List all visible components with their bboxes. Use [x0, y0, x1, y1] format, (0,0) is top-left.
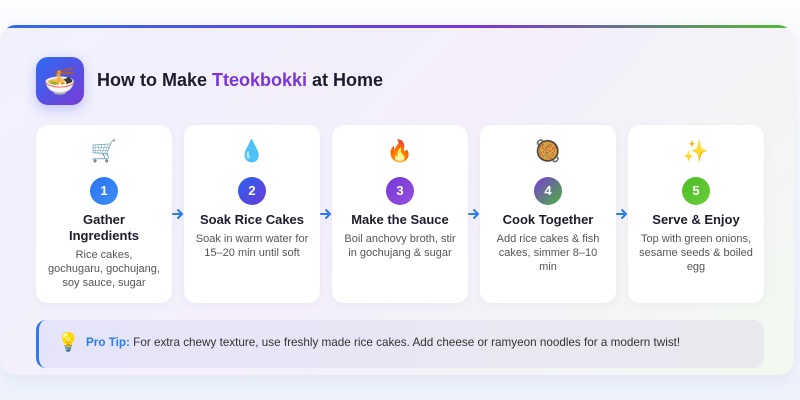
tip text: Pro Tip: For extra chewy texture, use freshly made rice cakes. Add cheese or ramyeon noodles for a modern twist! — [86, 336, 680, 349]
card 3 — [332, 125, 468, 303]
step 3 text: Boil anchovy broth, stir in gochujang & sugar — [344, 233, 456, 259]
step 5 text: Serve & Enjoy — [652, 212, 740, 227]
step number 1 — [90, 177, 118, 205]
step 3 text — [344, 212, 456, 259]
step number 2 — [238, 177, 266, 205]
step number 3 — [386, 177, 414, 205]
step number 3: 3 — [396, 183, 404, 198]
card 1 — [36, 125, 172, 303]
step 3 text: Make the Sauce — [351, 212, 449, 227]
arrow 1 — [172, 209, 183, 219]
step 4 text: Add rice cakes & fish cakes, simmer 8–10 min — [497, 233, 599, 273]
step 5 text: Top with green onions, sesame seeds & boiled egg — [639, 233, 753, 273]
icon: fire: 🔥 — [387, 140, 413, 163]
step 5 text — [639, 212, 753, 273]
step number 4 — [534, 177, 562, 205]
step 1 text: Gather Ingredients — [69, 212, 139, 243]
card 2 — [184, 125, 320, 303]
card 4 — [480, 125, 616, 303]
card 5 — [628, 125, 764, 303]
step number 5 — [682, 177, 710, 205]
pro tip callout — [36, 320, 764, 368]
step number 5: 5 — [692, 183, 700, 198]
step 1 text — [48, 212, 160, 289]
icon: water drop: 💧 — [239, 140, 265, 163]
icon: noodle bowl: 🍜 — [44, 66, 76, 96]
step 2 text: Soak Rice Cakes — [200, 212, 304, 227]
step 2 text: Soak in warm water for 15–20 min until soft — [196, 233, 308, 259]
step 1 text: soy sauce, sugar — [62, 277, 146, 289]
arrow 4 — [616, 209, 627, 219]
icon: noodle bowl — [36, 57, 84, 105]
step 2 text — [196, 212, 308, 259]
step 4 text — [496, 212, 599, 273]
step 4 text: Cook Together — [503, 212, 593, 227]
arrow 3 — [468, 209, 479, 219]
step number 4: 4 — [544, 183, 552, 198]
icon: sparkles: ✨ — [683, 140, 709, 163]
title: How to Make Tteokbokki at Home — [97, 70, 383, 90]
icon: cart: 🛒 — [91, 140, 117, 163]
arrow 2 — [320, 209, 331, 219]
icon: pan: 🥘 — [535, 140, 561, 163]
step 1 text: gochugaru, gochujang, — [48, 263, 160, 275]
icon: bulb: 💡 — [57, 332, 79, 352]
step 1 text: Rice cakes, — [76, 249, 132, 261]
step number 2: 2 — [248, 183, 256, 198]
step number 1: 1 — [100, 183, 108, 198]
